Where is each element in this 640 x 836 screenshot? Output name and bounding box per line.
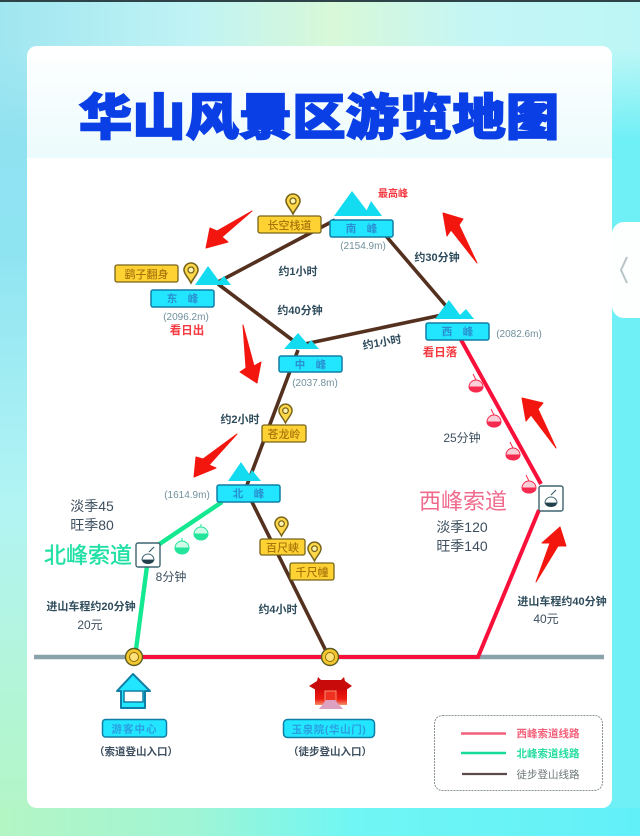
middle peak [279, 333, 342, 389]
arrow: along west cableway [522, 398, 556, 448]
west cableway prices [436, 519, 488, 554]
south peak: (2154.9m) [340, 241, 386, 252]
north peak [164, 462, 280, 502]
south peak [330, 191, 393, 252]
east peak [151, 266, 231, 337]
scenic spot: 千尺幢 [290, 542, 334, 580]
west peak [423, 300, 542, 359]
east peak: 东 峰 [167, 292, 199, 305]
time label: west cableway: 25分钟 [443, 430, 481, 445]
time label: east to middle: 约40分钟 [277, 303, 323, 317]
label: Yuquan temple: （徒步登山入口） [288, 745, 372, 758]
node: Yuquan temple [322, 648, 338, 666]
scenic spot: 千尺幢: 千尺幢 [296, 565, 328, 579]
icon: west cable station [539, 486, 563, 511]
arrow: towards north peak [194, 434, 237, 477]
west peak: (2082.6m) [496, 329, 542, 340]
scenic spot: 鹞子翻身 [115, 263, 198, 283]
time label: middle to west: 约1小时 [362, 332, 402, 352]
label: highest peak: 最高峰 [378, 187, 408, 200]
time label: south to west: 约30分钟 [414, 250, 460, 264]
east peak: 看日出 [170, 323, 204, 337]
north cableway prices: 淡季45 [70, 498, 114, 514]
west cableway route [134, 338, 541, 657]
label: Yuquan temple: 玉泉院(华山门) [292, 723, 366, 736]
north road note: 20元 [77, 618, 103, 632]
scenic spot: 苍龙岭: 苍龙岭 [268, 427, 300, 441]
north cableway name: 北峰索道 [44, 543, 132, 568]
arrow: towards west cable station [536, 527, 566, 582]
south peak: 南 峰 [346, 222, 378, 235]
time label: north to gate: 约4小时 [258, 602, 298, 616]
time label: south to east: 约1小时 [278, 264, 318, 278]
label: Yuquan temple [284, 720, 374, 758]
scenic spot: 苍龙岭 [262, 404, 306, 442]
west peak: 西 峰 [442, 325, 474, 338]
north cableway route [135, 502, 222, 657]
legend [434, 716, 602, 790]
west cableway name: 西峰索道 [419, 489, 507, 514]
time label: north cableway: 8分钟 [156, 569, 186, 584]
west road note: 进山车程约40分钟 [517, 594, 607, 608]
hiking routes [218, 220, 446, 657]
ground line [34, 655, 604, 659]
north road note: 进山车程约20分钟 [46, 599, 136, 613]
west cableway prices: 淡季120 [436, 519, 488, 535]
label: visitor centre: 游客中心 [112, 722, 158, 736]
icon: visitor centre house [117, 674, 150, 708]
north road note [46, 599, 136, 632]
west road note [517, 594, 607, 626]
scenic spot: 百尺峡: 百尺峡 [266, 540, 299, 554]
arrow: towards middle peak [240, 325, 261, 383]
green cable cars [175, 524, 208, 554]
east peak: (2096.2m) [163, 312, 209, 323]
scenic spot: 鹞子翻身: 鹞子翻身 [124, 267, 168, 281]
title: 华山风景区游览地图 [79, 90, 559, 145]
label: visitor centre [94, 720, 178, 758]
scenic spot: 百尺峡 [260, 517, 305, 555]
arrow: towards south peak [443, 213, 477, 263]
scenic spot: 长空栈道: 长空栈道 [268, 218, 312, 232]
north peak: 北 峰 [233, 487, 265, 500]
icon: Yuquan temple gate [309, 677, 352, 709]
north cableway prices: 旺季80 [70, 517, 114, 533]
north peak: (1614.9m) [164, 490, 210, 501]
red cable cars [469, 374, 536, 493]
legend: 徒步登山线路 [516, 768, 580, 781]
arrow: towards east peak [206, 211, 252, 248]
legend: 西峰索道线路 [516, 727, 580, 740]
label: visitor centre: （索道登山入口） [94, 745, 178, 758]
middle peak: (2037.8m) [292, 378, 338, 389]
west peak: 看日落 [423, 345, 458, 359]
node: visitor centre [126, 648, 142, 666]
side tab [612, 222, 640, 318]
scenic spot: 长空栈道 [258, 194, 321, 233]
west road note: 40元 [533, 612, 559, 626]
north cableway prices [70, 498, 114, 533]
middle peak: 中 峰 [295, 358, 327, 371]
time label: middle to north: 约2小时 [220, 412, 260, 426]
icon: north cable station [136, 543, 160, 567]
west cableway prices: 旺季140 [436, 538, 488, 554]
legend: 北峰索道线路 [516, 747, 580, 760]
